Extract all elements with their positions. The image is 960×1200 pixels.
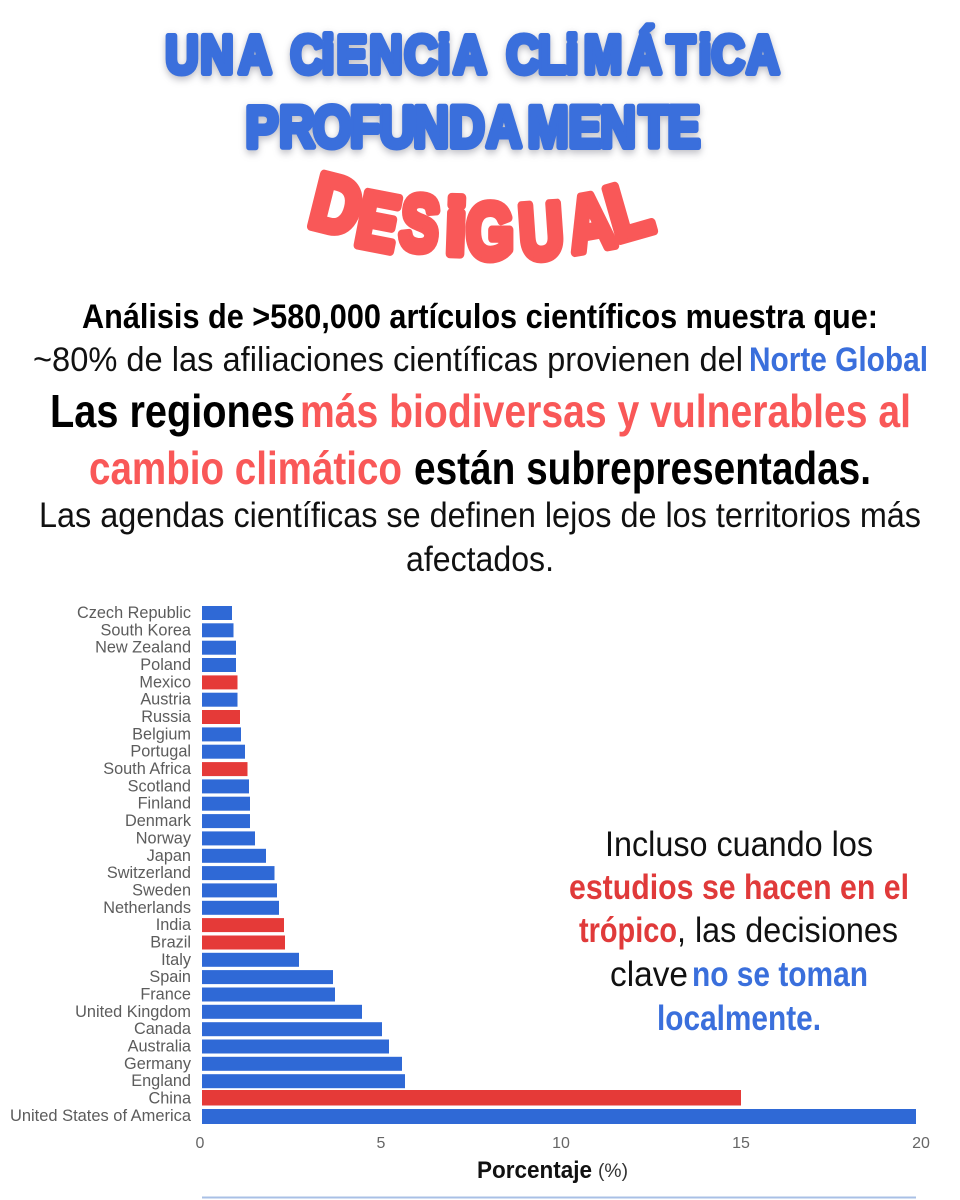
country labels: India <box>156 916 192 934</box>
country labels: Finland <box>138 795 191 813</box>
intro line: north share: Norte Global <box>749 341 928 379</box>
country labels: Canada <box>134 1020 192 1038</box>
title: DESIGUAL arched word: L <box>596 162 661 258</box>
country labels: Scotland <box>128 777 191 795</box>
callout: decisions not taken locally <box>569 825 909 1038</box>
intro text block <box>33 298 928 579</box>
closing line: agendas <box>39 496 921 579</box>
country labels: Japan <box>147 847 191 865</box>
x axis ticks <box>196 1135 930 1152</box>
country labels: Switzerland <box>107 864 191 882</box>
bars <box>202 606 916 1124</box>
x axis ticks: 15 <box>732 1135 750 1152</box>
callout: decisions not taken locally: clave <box>610 955 688 994</box>
country labels: England <box>131 1072 191 1090</box>
intro line: analysis: Análisis de >580,000 artículos científicos muestra que: <box>82 298 878 336</box>
country labels: Belgium <box>132 725 191 743</box>
callout: decisions not taken locally: Incluso cuando los <box>605 825 873 864</box>
x axis title: Porcentaje <box>477 1157 592 1184</box>
callout: decisions not taken locally: localmente. <box>657 999 821 1038</box>
country labels: Denmark <box>125 812 192 830</box>
closing line: agendas: afectados. <box>406 540 554 579</box>
title: DESIGUAL arched word: S <box>396 178 444 269</box>
x axis ticks: 10 <box>552 1135 570 1152</box>
country labels <box>10 604 192 1125</box>
title: blue lines <box>165 25 780 160</box>
x axis ticks: 20 <box>912 1135 930 1152</box>
x axis ticks: 0 <box>196 1135 205 1152</box>
country labels: Brazil <box>150 934 191 952</box>
title: DESIGUAL arched word: D <box>302 158 370 254</box>
country labels: Italy <box>161 951 192 969</box>
country labels: China <box>148 1090 192 1108</box>
country labels: Mexico <box>139 673 191 691</box>
country labels: Russia <box>141 708 192 726</box>
callout: decisions not taken locally: trópico <box>579 911 677 950</box>
x axis title: (%) <box>598 1161 628 1182</box>
bar chart: share by country <box>10 604 930 1184</box>
callout: decisions not taken locally: , las decisiones <box>677 911 898 950</box>
country labels: United Kingdom <box>75 1003 191 1021</box>
intro line: north share: ~80% de las afiliaciones científicas provienen del <box>33 341 743 379</box>
country labels: Norway <box>136 829 192 847</box>
country labels: Poland <box>140 656 191 674</box>
country labels: Australia <box>128 1038 192 1056</box>
title: DESIGUAL arched word <box>302 158 661 276</box>
title: blue lines: PROFUNDAMENTE <box>246 95 700 160</box>
title: DESIGUAL arched word: E <box>350 175 406 268</box>
statement: underrepresented regions <box>50 385 911 494</box>
country labels: South Africa <box>103 760 192 778</box>
country labels: Czech Republic <box>77 604 191 622</box>
country labels: France <box>140 986 191 1004</box>
country labels: Sweden <box>132 881 191 899</box>
statement: underrepresented regions: Las regiones <box>50 385 295 437</box>
country labels: South Korea <box>100 621 192 639</box>
title: blue lines: UNA CiENCiA CLiMÁTiCA <box>165 25 780 85</box>
country labels: Spain <box>149 968 191 986</box>
statement: underrepresented regions: cambio climático <box>89 442 402 494</box>
x axis ticks: 5 <box>377 1135 386 1152</box>
statement: underrepresented regions: están subrepresentadas. <box>414 442 871 494</box>
callout: decisions not taken locally: estudios se hacen en el <box>569 868 909 907</box>
callout: decisions not taken locally: no se toman <box>692 955 868 994</box>
country labels: United States of America <box>10 1107 192 1125</box>
country labels: New Zealand <box>95 639 191 657</box>
title: DESIGUAL arched word: A <box>561 175 620 269</box>
country labels: Netherlands <box>103 899 191 917</box>
title: DESIGUAL arched word: G <box>466 188 514 275</box>
country labels: Portugal <box>130 743 191 761</box>
title: DESIGUAL arched word: i <box>444 184 468 272</box>
country labels: Germany <box>124 1055 192 1073</box>
country labels: Austria <box>140 691 192 709</box>
title: DESIGUAL arched word: U <box>516 186 566 276</box>
